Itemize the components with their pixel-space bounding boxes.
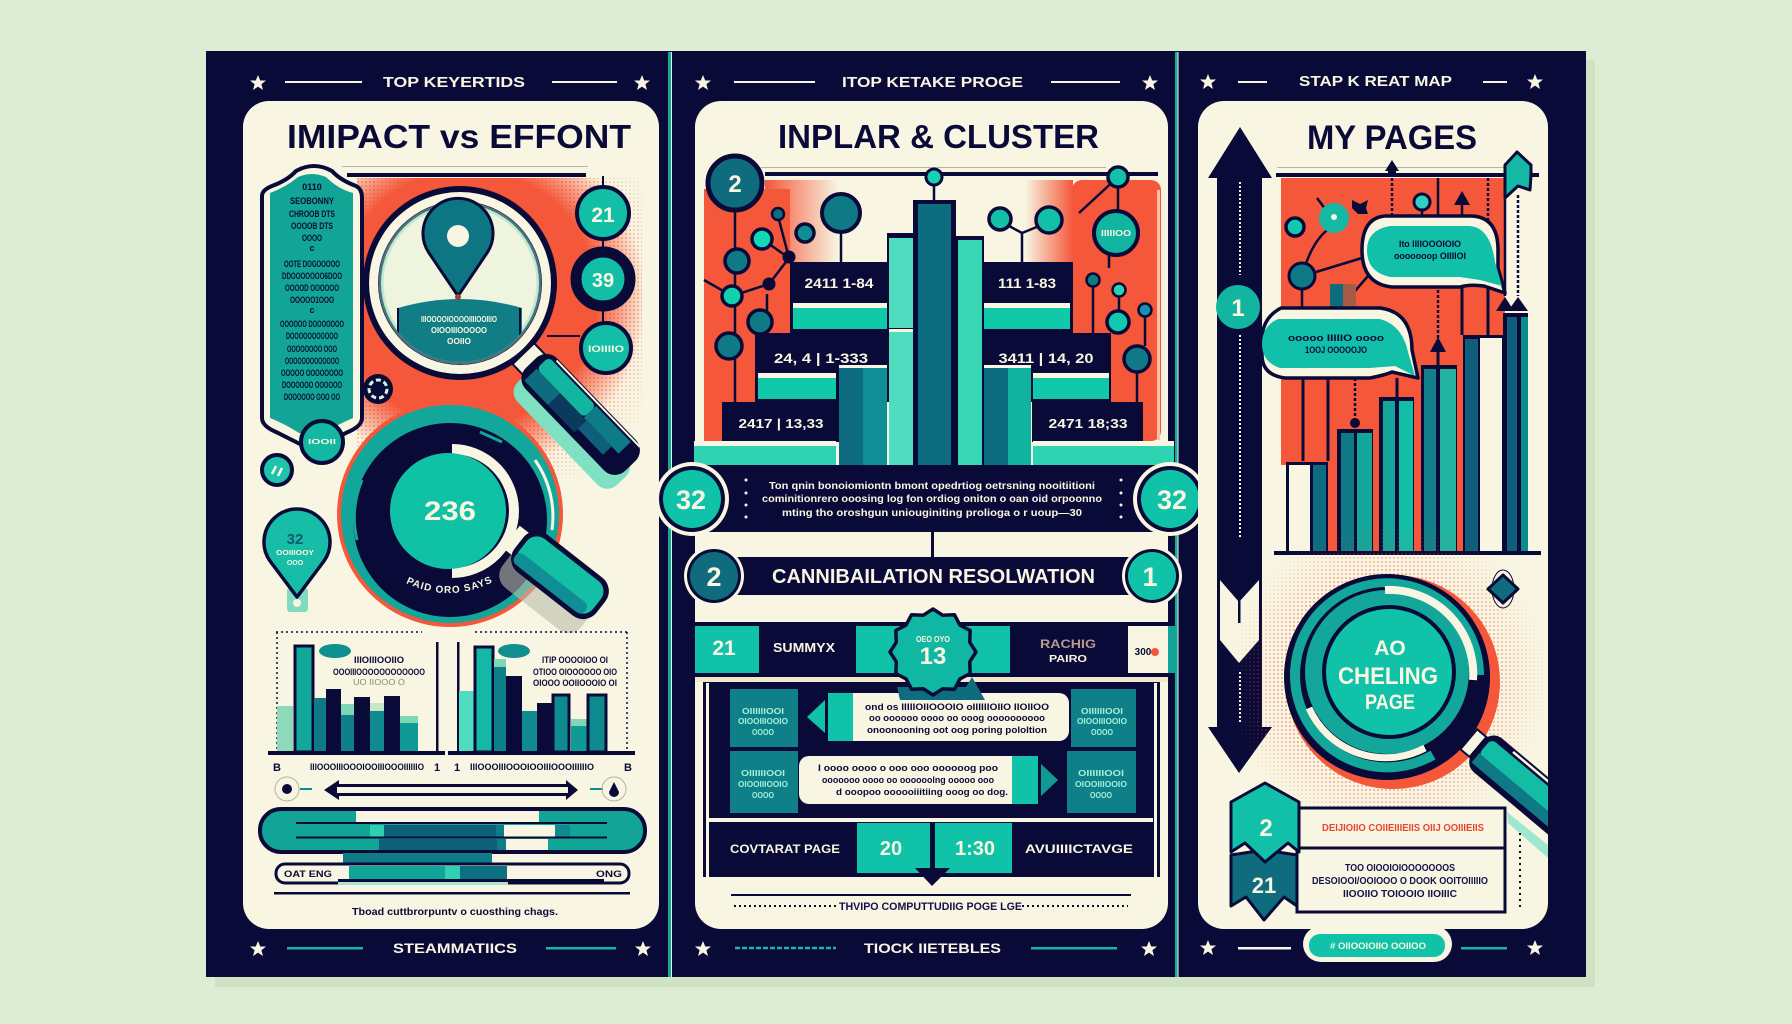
network: centre and right cluster xyxy=(926,167,1152,402)
badge: 32 right xyxy=(1133,462,1207,536)
circle badge: 39: 39 xyxy=(592,270,614,292)
right chart text xyxy=(533,655,617,688)
bar chart: rising pages xyxy=(1274,287,1541,555)
note: lower: ooooooo oooo oo oooooolng ooooo ooo xyxy=(822,775,994,785)
magnifier: location pin: OOIIO xyxy=(447,337,471,346)
competing page box: top right: OIIIIIIOOI xyxy=(1081,707,1123,716)
callout: lower speech bubble: ooooo IIIIIO oooo xyxy=(1288,333,1385,343)
left chart text: UO IIOOO O xyxy=(353,678,405,687)
step: middle right xyxy=(982,333,1111,402)
footer: steammatics: STEAMMATIICS xyxy=(393,940,517,956)
competing page box: lower right: OOOO xyxy=(1090,791,1112,800)
callout: upper speech bubble: Ito IIIIOOOIOIO xyxy=(1399,239,1461,249)
magnifier: anchor page: PAGE xyxy=(1365,691,1415,714)
chart axis labels: IIIOOOIIIOOOIOOIIIOOOIIIIIIO xyxy=(470,762,594,772)
network nodes xyxy=(1286,198,1368,307)
circle badge: small label: IOIIIIO xyxy=(588,344,624,354)
magnifier: anchor page xyxy=(1284,574,1500,789)
callout: left banner: OOOOOO DOOOOOOO xyxy=(280,319,344,329)
header: top keywords: TOP KEYERTIDS xyxy=(383,74,525,91)
arrow: down xyxy=(915,868,950,886)
footer xyxy=(695,940,1157,956)
circle badge: 39 xyxy=(576,252,630,306)
summary band xyxy=(672,622,1177,677)
callout: left banner: 0110 xyxy=(302,182,322,192)
callout: left banner: OOOOB DTS xyxy=(291,221,333,231)
location pin badge: 32: 32 xyxy=(287,531,303,548)
summary band: SUMMYX xyxy=(773,640,835,655)
circle badge: 21: 21 xyxy=(591,204,615,227)
summary band: 21 xyxy=(712,637,736,660)
info box: description: TOO OIOOIOIOOOOOOOS xyxy=(1345,863,1455,874)
secondary progress pill: ONG xyxy=(596,869,622,879)
competing page box: top right: OIOOIIIOOIO xyxy=(1077,717,1127,726)
magnifier handle: right xyxy=(1460,728,1548,858)
note: lower: d ooopoo oooooiiitiing ooog oo dog. xyxy=(836,787,1008,797)
competing page box: lower right: OIIIIIIOOI xyxy=(1078,769,1124,778)
callout: left banner xyxy=(262,166,362,444)
competing page box: lower left: OOOO xyxy=(752,791,774,800)
competing page box: lower left: OIOOIIIOOIO xyxy=(738,780,788,789)
competing page box: lower left: OIIIIIIOOI xyxy=(741,769,785,778)
bar 2 xyxy=(1337,378,1373,553)
connector lines xyxy=(547,176,603,336)
note: lower: I oooo oooo o ooo ooo oooooog poo xyxy=(818,763,999,773)
node: numbered 2 xyxy=(708,156,762,210)
footer xyxy=(1200,926,1543,962)
right chart text: OIOOO OOIIOOOIO OI xyxy=(533,678,617,688)
progress pill xyxy=(260,809,645,863)
step: upper left xyxy=(790,262,889,333)
magnifier: location pin xyxy=(363,186,557,380)
right bar chart xyxy=(457,642,606,752)
callout: lower speech bubble: 1OOJ OOOOOJO xyxy=(1305,345,1367,355)
circle badge: small label xyxy=(581,323,631,373)
stats row: 1:30 xyxy=(955,838,995,860)
panel: impact vs effort xyxy=(243,74,659,956)
arrow: vertical double: 1 xyxy=(1231,295,1245,322)
stepped bar chart xyxy=(694,200,1174,465)
panel: my pages xyxy=(1198,74,1548,962)
callout: left banner: OOOOOOOOOOOOO xyxy=(285,356,339,366)
badge: 2 xyxy=(1231,783,1299,862)
callout: left banner: OOOOOOOO OOO xyxy=(287,344,337,354)
top connectors xyxy=(1385,160,1518,296)
secondary progress pill xyxy=(276,864,629,885)
text band: Ton qnin bonoiomiontn bmont opedrtiog oetrsning nooitiitioni xyxy=(769,481,1095,492)
callout: left banner: DOOOOOO OOO OO xyxy=(284,392,340,402)
chart frame: dotted border xyxy=(276,632,627,750)
bar 6 xyxy=(1496,297,1528,553)
node: labelled circle: IIIIIOO xyxy=(1101,229,1131,238)
coral backdrop xyxy=(704,180,1161,441)
chart axis labels: 1 xyxy=(434,762,440,774)
info box: description xyxy=(1297,848,1505,912)
location pin badge: 32: OOIIIOOY xyxy=(276,550,314,557)
card background xyxy=(695,101,1168,929)
badge: 21: 21 xyxy=(1252,873,1276,898)
node: numbered 2: 2 xyxy=(728,171,742,198)
callout: lower speech bubble xyxy=(1262,308,1418,378)
note: lower xyxy=(799,756,1038,804)
summary band: 300 xyxy=(1135,647,1152,658)
step: upper right xyxy=(982,262,1073,333)
callout: left banner: OOOOD OOOOOO xyxy=(285,283,339,293)
chart axis labels: IIIOOOIIIOOOIOOIIIOOOIIIIIIO xyxy=(310,762,424,772)
badge: 21 xyxy=(1231,850,1297,920)
magnifier handle: lower xyxy=(493,518,616,640)
card background xyxy=(243,101,659,929)
step: lower right xyxy=(1032,402,1143,442)
caption: Tboad cuttbrorpuntv o cuosthing chags. xyxy=(352,906,558,918)
chart axis labels: B xyxy=(624,762,632,774)
node: labelled circle xyxy=(1094,211,1138,255)
step: middle left xyxy=(755,333,889,402)
small link icon xyxy=(262,455,292,485)
header: top keywords xyxy=(250,74,650,91)
stats row: AVUIIIICTAVGE xyxy=(1025,842,1133,856)
bar 3 xyxy=(1379,378,1414,553)
magnifier: central value 236 xyxy=(337,405,563,627)
callout: left banner: c xyxy=(309,243,315,253)
badge: 2: 2 xyxy=(1259,815,1273,842)
small diamond icon xyxy=(1488,570,1518,608)
header: ITOP KETAKE PROGE xyxy=(842,74,1023,91)
dotted rule xyxy=(1519,833,1521,908)
circle badge: 21 xyxy=(577,187,629,239)
stats row xyxy=(730,823,1133,873)
competing page box: lower right: OIOOIIIOOIO xyxy=(1075,780,1127,789)
callout: left banner: SEOBONNY xyxy=(290,196,334,206)
header: STAP K REAT MAP xyxy=(1299,73,1452,90)
step: lower right: 2471 18;33 xyxy=(1048,416,1128,431)
note: competing page: THVIPO COMPUTTUDIIG POGE LGE xyxy=(839,901,1022,913)
badge: 32 left xyxy=(655,462,729,536)
coral backdrop xyxy=(1281,178,1506,555)
chart axis labels xyxy=(273,762,632,774)
bar 4 xyxy=(1421,290,1457,553)
callout: upper speech bubble xyxy=(1362,216,1505,293)
coral halftone backdrop xyxy=(357,178,642,478)
competing page box: top left xyxy=(730,689,798,747)
magnifier handle: upper xyxy=(507,339,646,495)
stats row: COVTARAT PAGE xyxy=(730,842,840,856)
footer: TIOCK IIETEBLES xyxy=(864,940,1001,956)
bar 1 xyxy=(1286,378,1328,553)
infographic canvas xyxy=(206,51,1595,987)
callout: left banner: DOOOOOO OOOOOO xyxy=(282,380,342,390)
magnifier: central value 236: 236 xyxy=(424,496,476,526)
secondary progress pill: OAT ENG xyxy=(284,869,332,879)
text band: cominitionrero ooosing log fon ordiog oniton o oan oid orpoonno xyxy=(762,494,1102,505)
step: upper right: 111 1-83 xyxy=(998,275,1056,291)
competing page box: top right xyxy=(1071,689,1136,747)
badge: 13 seal xyxy=(890,609,985,700)
small circle label xyxy=(301,421,343,463)
callout: left banner: OOOOO1OOO xyxy=(290,295,334,305)
badge: 13 seal: 13 xyxy=(920,643,946,670)
step: lower left: 2417 | 13,33 xyxy=(738,416,824,431)
footer: steammatics xyxy=(250,940,651,956)
callout: left banner: DDOOOOOOO6DOO xyxy=(282,271,342,281)
banner: cannibalisation resolution xyxy=(684,546,1182,606)
callout: left banner: OOTE DOGOOOOO xyxy=(284,259,340,269)
summary band: RACHIG xyxy=(1040,637,1096,651)
badge: 32 left: 32 xyxy=(676,485,706,515)
header xyxy=(695,74,1158,91)
footer pill xyxy=(1303,926,1452,962)
callout: left banner: OOOO xyxy=(302,233,322,243)
chart axis labels: 1 xyxy=(454,762,460,774)
chart axis labels: B xyxy=(273,762,281,774)
footer pill: # OIIOOIOIIO OOIIOO xyxy=(1330,941,1426,951)
panel: inplar and cluster xyxy=(655,74,1207,956)
text band xyxy=(672,465,1175,532)
left chart text: IIIOIIIOOIIO xyxy=(354,655,404,665)
network: left cluster xyxy=(704,156,860,402)
callout: upper speech bubble: ooooooop OIIIIOI xyxy=(1394,251,1466,261)
left bar chart xyxy=(277,642,438,752)
magnifier: anchor page: CHELING xyxy=(1338,663,1438,690)
resolution block xyxy=(703,682,1160,877)
arrow: right xyxy=(1041,764,1058,796)
banner: cannibalisation resolution: 1 xyxy=(1142,562,1158,592)
halftone halo xyxy=(1233,525,1543,806)
competing page box: lower right xyxy=(1067,751,1136,813)
right chart text: OTIOO OIOOOOOO OIO xyxy=(533,667,617,677)
small globe icon xyxy=(363,374,393,404)
magnifier: central value 236: PAID ORO SAYS xyxy=(406,576,492,593)
info box: highlighted note xyxy=(1299,808,1505,848)
bar 5 xyxy=(1462,287,1503,553)
step: middle right: 3411 | 14, 20 xyxy=(998,350,1094,366)
note: top: oo oooooo oooo oo ooog oooooooooo xyxy=(869,713,1046,723)
flag marker xyxy=(1505,152,1531,198)
competing page box: lower left xyxy=(730,751,798,813)
info box: description: DESOIOOI/OOIOOO O DOOK OOITOIIIIIO xyxy=(1312,876,1488,887)
central bars xyxy=(839,200,1031,465)
step: upper left: 2411 1-84 xyxy=(804,275,874,291)
left chart text xyxy=(333,655,425,687)
location pin badge: 32 xyxy=(264,509,330,612)
badge: 13 seal: OEO OYO xyxy=(916,635,950,644)
heading: INPLAR & CLUSTER xyxy=(778,118,1099,155)
step: lower left xyxy=(722,402,839,442)
note: top: ond os IIIIIOIIOOOIO oIIIIIIOIIO IIOIIOO xyxy=(865,702,1049,712)
heading: impact vs effort: IMIPACT vs EFFONT xyxy=(287,118,631,155)
navy board behind all three panels xyxy=(206,51,1586,977)
text band: mting tho oroshgun uniouginiting prolioga o r uoup—30 xyxy=(782,508,1082,519)
badge: 32 right: 32 xyxy=(1157,485,1187,515)
callout: left banner: OOOOO OOOOOOOO xyxy=(281,368,343,378)
arrow: left xyxy=(807,700,825,733)
small circle label: IOOII xyxy=(308,439,336,446)
location pin badge: 32: OOO xyxy=(287,560,304,567)
step: middle left: 24, 4 | 1-333 xyxy=(774,350,868,366)
callout: left banner: CHROOB DTS xyxy=(289,209,335,219)
right chart text: ITIP OOOOIOO OI xyxy=(542,655,608,665)
banner: cannibalisation resolution: CANNIBAILATION RESOLWATION xyxy=(772,566,1095,588)
callout: left banner: c xyxy=(309,305,315,315)
summary band: PAIRO xyxy=(1049,654,1087,665)
callout: left banner: DOOOOOOOOOOO xyxy=(286,331,338,341)
vertical divider xyxy=(931,532,934,557)
banner: cannibalisation resolution: 2 xyxy=(706,562,722,592)
card background xyxy=(1198,101,1548,929)
left chart text: OOOIIIOOOOOOOOOOOO xyxy=(333,667,425,677)
heading: MY PAGES xyxy=(1307,119,1477,157)
competing page box: top left: OIOOIIIOOIO xyxy=(738,717,788,726)
magnifier: location pin: IIIOOOOIOOOOIIIIOOIIIO xyxy=(421,315,497,324)
competing page box: top left: OIIIIIIOOI xyxy=(742,707,784,716)
note: top xyxy=(828,693,1069,741)
note: top: onoonooning oot oog poring pololtion xyxy=(867,725,1047,735)
info box: highlighted note: DEIJIOIIO COIIEIIIEIIS OIIJ OOIIIEIIS xyxy=(1322,823,1484,834)
base strips xyxy=(694,441,1174,465)
header xyxy=(1200,73,1543,90)
magnifier: location pin: OIOOIIIOOOOO xyxy=(431,326,487,335)
slider: impact to effort xyxy=(275,777,626,801)
stats row: 20 xyxy=(880,838,902,860)
competing page box: top right: OOOO xyxy=(1091,728,1113,737)
magnifier: anchor page: AO xyxy=(1374,637,1406,660)
info box: description: IIOOIIO TOIOOIO IIOIIIC xyxy=(1343,889,1457,900)
bar charts xyxy=(268,632,635,774)
arrow: vertical double xyxy=(1208,127,1272,773)
competing page box: top left: OOOO xyxy=(752,728,774,737)
